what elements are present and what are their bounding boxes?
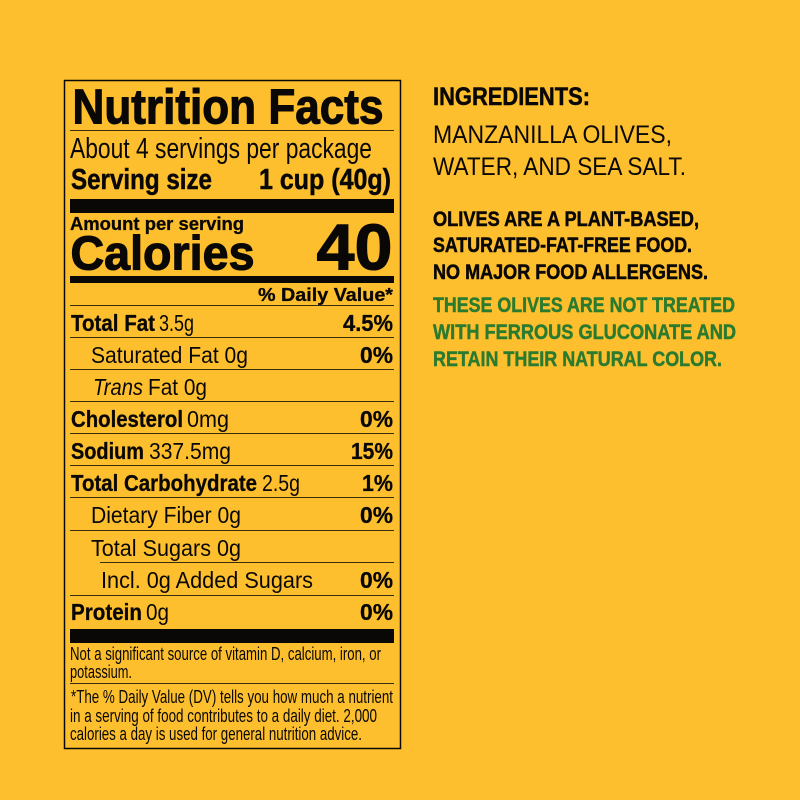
heading: ingredients: INGREDIENTS: xyxy=(433,83,590,111)
row: added sugars: 0% xyxy=(360,567,393,593)
daily value header: % Daily Value* xyxy=(258,285,393,305)
row: sodium: 15% xyxy=(351,438,393,464)
row: sodium xyxy=(71,438,393,464)
text block: plant-based statement: NO MAJOR FOOD ALLERGENS. xyxy=(433,261,708,284)
row: protein: 0g xyxy=(146,599,169,625)
panel: nutrition facts label xyxy=(64,80,400,748)
calories: Calories xyxy=(70,228,254,280)
serving size: Serving size xyxy=(71,164,212,196)
row: saturated fat: 0% xyxy=(360,342,393,368)
row: total sugars: Total Sugars 0g xyxy=(91,535,241,561)
note: not a significant source xyxy=(70,644,381,682)
text block: plant-based statement xyxy=(433,208,708,284)
note: not a significant source: Not a significant source of vitamin D, calcium, iron, or xyxy=(70,644,381,664)
note: not a significant source: potassium. xyxy=(70,662,132,682)
row: trans fat xyxy=(93,374,207,400)
row: protein: 0% xyxy=(360,599,393,625)
row: total fat: 4.5% xyxy=(343,310,393,336)
row: sodium: 337.5mg xyxy=(149,438,231,464)
row: cholesterol: Cholesterol xyxy=(71,406,183,432)
footnote: daily value explanation: calories a day is used for general nutrition advice. xyxy=(70,724,362,744)
row: total carbohydrate: 2.5g xyxy=(262,470,300,496)
footnote: daily value explanation xyxy=(70,687,393,744)
row: cholesterol xyxy=(71,406,393,432)
ingredients list: MANZANILLA OLIVES, xyxy=(433,121,672,149)
text block: natural color statement: RETAIN THEIR NATURAL COLOR. xyxy=(433,348,722,371)
row: dietary fiber: Dietary Fiber 0g xyxy=(91,502,241,528)
row: total carbohydrate xyxy=(71,470,393,496)
footnote: daily value explanation: *The % Daily Value (DV) tells you how much a nutrient xyxy=(71,687,393,707)
text block: plant-based statement: SATURATED-FAT-FREE FOOD. xyxy=(433,234,692,257)
footnote: daily value explanation: in a serving of food contributes to a daily diet. 2,000 xyxy=(70,706,377,726)
row: saturated fat xyxy=(91,342,393,368)
calories xyxy=(70,210,392,284)
servings per package: About 4 servings per package xyxy=(70,133,372,165)
text block: natural color statement: THESE OLIVES ARE NOT TREATED xyxy=(433,294,735,317)
row: trans fat: Fat 0g xyxy=(148,374,207,400)
row: cholesterol: 0% xyxy=(360,406,393,432)
row: total fat xyxy=(71,310,393,336)
ingredients list: WATER, AND SEA SALT. xyxy=(433,153,686,181)
row: dietary fiber xyxy=(91,502,393,528)
serving size: 1 cup (40g) xyxy=(259,164,391,196)
row: protein: Protein xyxy=(71,599,142,625)
row: dietary fiber: 0% xyxy=(360,502,393,528)
row: sodium: Sodium xyxy=(71,438,144,464)
text block: natural color statement xyxy=(433,294,736,371)
row: total carbohydrate: Total Carbohydrate xyxy=(71,470,257,496)
ingredients list xyxy=(433,121,686,181)
row: trans fat: Trans xyxy=(93,374,143,400)
amount per serving: Amount per serving xyxy=(70,214,244,234)
heading: Nutrition Facts: Nutrition Facts xyxy=(72,80,384,134)
row: added sugars: Incl. 0g Added Sugars xyxy=(101,567,313,593)
text block: natural color statement: WITH FERROUS GLUCONATE AND xyxy=(433,321,736,344)
row: saturated fat: Saturated Fat 0g xyxy=(91,342,248,368)
row: total carbohydrate: 1% xyxy=(362,470,393,496)
serving size xyxy=(71,164,391,196)
text block: plant-based statement: OLIVES ARE A PLANT-BASED, xyxy=(433,208,699,231)
row: total fat: Total Fat xyxy=(71,310,155,336)
row: protein xyxy=(71,599,393,625)
row: total fat: 3.5g xyxy=(159,310,194,336)
row: cholesterol: 0mg xyxy=(187,406,229,432)
calories: 40 xyxy=(316,210,392,284)
